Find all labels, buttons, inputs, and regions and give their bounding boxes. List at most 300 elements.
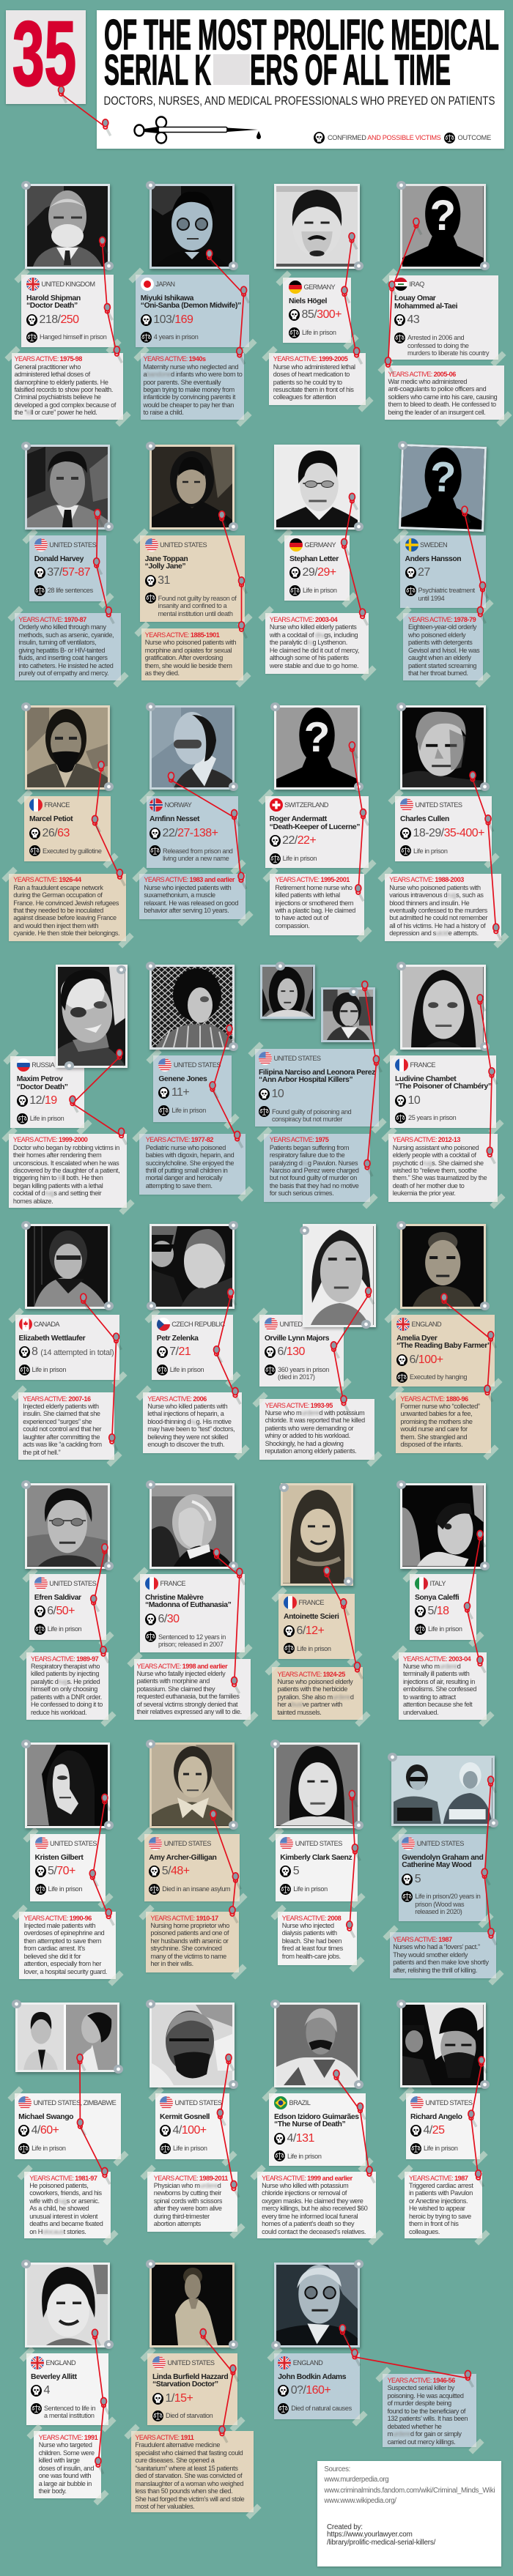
years: Saldivar: patients with a DNR order. (31, 1693, 102, 1701)
string: Malèvre (214, 1548, 245, 1693)
photo: Richard Angelo (400, 2002, 485, 2087)
photo: Amelia Dyer (400, 1224, 485, 1309)
years: Chambet: psychotic drugs. She claimed she (393, 1159, 484, 1167)
victims count (410, 2125, 479, 2137)
panel: sources and credits (317, 2461, 501, 2566)
photo: unknown silhouette (Hansson) (399, 444, 487, 532)
outcome: Life in prison (297, 1645, 331, 1652)
years: Jones: YEARS ACTIVE: 1977-82 (146, 1136, 213, 1143)
years: Caleffi: Nurse who murdered (403, 1663, 460, 1670)
string: Allitt (92, 2329, 108, 2474)
outcome (289, 327, 336, 338)
panel: Adams info (274, 2353, 360, 2419)
years: al-Taei: soldiers who came into his care, causing (388, 393, 497, 401)
string: Wettlaufer (81, 1293, 122, 1450)
photo: Stephan Letter (274, 445, 360, 530)
name (270, 815, 360, 831)
flag and country: NORWAY (164, 801, 191, 809)
victims count: 6/50+ (47, 1605, 75, 1617)
name: Efren Saldivar (34, 1594, 81, 1602)
outcome: Life in prison (293, 1885, 328, 1893)
panel: Andermatt info (265, 796, 369, 868)
years: Hazzard: died of starvation. She was convicted of (135, 2472, 242, 2479)
years: Scieri (271, 1667, 363, 1720)
years: Gosnell: YEARS ACTIVE: 1989-2011 (154, 2174, 228, 2181)
years: Graham and Wood: YEARS ACTIVE: 1987 (393, 1936, 452, 1943)
years: Zelenka (143, 1392, 242, 1453)
years: Gilbert: Injected male patients with (24, 1922, 95, 1929)
years: Guimarães: chloride injections or removal of (262, 2189, 347, 2197)
years: Angelo: Triggered cardiac arrest (409, 2182, 473, 2189)
years: Majors: YEARS ACTIVE: 1993-95 (265, 1402, 333, 1409)
flag and country (145, 538, 207, 552)
victims count (270, 835, 367, 847)
outcome: Died in an insane asylum (162, 1885, 230, 1893)
flag and country: UNITED STATES (49, 541, 96, 549)
years: Graham and Wood: Nurses who had a “lovers’ pact.” (393, 1943, 480, 1950)
years: Petiot: during the German occupation of (13, 891, 103, 899)
flag and country: UNITED STATES (167, 2359, 214, 2367)
years: Dyer: would nurse and care for (400, 1425, 468, 1433)
years: Petrov: triggering him to kill both. He then (13, 1174, 103, 1181)
years: Petrov: cocktail of drugs and setting their (13, 1189, 101, 1197)
years: Zelenka: lethal injections of heparin, a (147, 1410, 224, 1417)
string: Guimarães (333, 2070, 374, 2183)
years: Adams: murdered for gain or simply (388, 2430, 462, 2438)
flag and country: UNITED STATES (274, 1055, 320, 1062)
victims count: 10 (271, 1088, 284, 1100)
outcome (259, 1106, 377, 1124)
years: Majors: whiny or added to his workload. (265, 1432, 350, 1439)
photo: Sonya Caleffi (400, 1483, 485, 1569)
years: Andermatt: compassion. (275, 922, 309, 929)
photo: Marcel Petiot (25, 705, 110, 790)
years: Petrov: began killing patients with a lethal (13, 1182, 103, 1189)
years: Hansson: Gevisol and Ivisol. He was (408, 647, 479, 654)
victims count (405, 566, 430, 579)
credit: https://www.yourlawyer.com (327, 2531, 413, 2539)
panel: Graham and Wood info (399, 1834, 486, 1921)
flag and country (400, 798, 490, 812)
flag and country: FRANCE (44, 801, 70, 809)
panel: Letter info (284, 535, 350, 601)
outcome (402, 1891, 484, 1916)
years: Ishikawa: to raise a child. (144, 409, 184, 416)
string: Shipman (100, 237, 122, 363)
name (145, 1595, 243, 1610)
years: Allitt (34, 2431, 101, 2498)
flag and country: UNITED STATES (280, 1321, 326, 1328)
victims count (35, 1866, 104, 1877)
string: Angelo (468, 2057, 487, 2186)
string: Saenz (347, 1790, 360, 1937)
flag and country: RUSSIA (32, 1061, 54, 1069)
outcome: Life in prison (48, 1625, 81, 1633)
years: Narciso and Perez (264, 1134, 370, 1202)
flag and country (259, 1052, 377, 1065)
victims count: 18-29/35-400+ (413, 827, 484, 839)
panel: Shipman info (21, 275, 114, 347)
panel: Cullen info (395, 796, 491, 861)
years: Adams: found to be the beneficiary of (388, 2408, 465, 2415)
victims count (29, 827, 70, 839)
years: Saldivar (26, 1652, 108, 1720)
years: Archer-Gilligan: poisoned patients and one of (150, 1929, 229, 1937)
years: Harvey: methods, such as arsenic, cyanide, (18, 631, 114, 639)
flag and country: CZECH REPUBLIC (171, 1321, 225, 1328)
years: al-Taei (385, 365, 504, 420)
years: Allitt: a large air bubble in (39, 2480, 92, 2487)
years: Harvey (15, 613, 121, 680)
flag and country (284, 1596, 353, 1609)
outcome: a mental institution (44, 2412, 95, 2419)
outcome: Life in prison (303, 587, 337, 594)
years: Nesset: Nurse who injected patients with (144, 884, 231, 891)
years: Petrov: their homes after rendering them (13, 1151, 101, 1159)
string: Zelenka (214, 1289, 240, 1404)
years: Hazzard: most of her valuables. (135, 2503, 194, 2510)
years: al-Taei: anti-coagulants to police officers and (388, 385, 486, 393)
name: Gwendolyn Graham and (402, 1854, 483, 1862)
years: Gilbert: YEARS ACTIVE: 1990-96 (24, 1915, 92, 1922)
victims count (18, 2125, 119, 2137)
panel: Högel info (283, 278, 351, 343)
outcome (158, 1105, 230, 1116)
victims count: 37/57-87 (47, 566, 90, 579)
name: “Madonna of Euthanasia” (145, 1601, 231, 1609)
years: Angelo (405, 2172, 482, 2238)
years: Caleffi: terminally ill patients with (403, 1670, 469, 1677)
years: Narciso and Perez: respiratory failure due to the (270, 1151, 344, 1159)
years: Adams: carried out mercy killings. (388, 2438, 455, 2446)
years: Gosnell: during third-trimester (154, 2213, 210, 2220)
years: Gilbert: then attempted to save them (24, 1937, 101, 1945)
outcome: Life in prison (170, 1366, 204, 1373)
years: Letter: with a cocktail of drugs, including (270, 631, 358, 639)
years: Saenz: YEARS ACTIVE: 2008 (282, 1915, 341, 1922)
photo: Petr Zelenka (150, 1224, 235, 1309)
outcome: Executed by guillotine (43, 847, 102, 855)
years: Gilbert: attention, especially from her (24, 1960, 101, 1967)
victims count (280, 1866, 356, 1877)
photo: Harold Shipman (25, 184, 110, 269)
years: Letter: although some of his patients (270, 654, 349, 661)
years: Swango: As a child, he showed (29, 2205, 89, 2212)
years: Dyer: Former nurse who “collected” (400, 1403, 480, 1410)
years: Graham and Wood: after, relishing the thrill of killing. (393, 1967, 477, 1974)
name: Antoinette Scieri (284, 1613, 339, 1621)
years: Cullen: blood thinners and insulin. He (389, 899, 469, 907)
years: Caleffi: attention because she felt (403, 1701, 472, 1708)
victims count: 6/30 (158, 1613, 179, 1625)
flag and country: UNITED STATES (160, 541, 207, 549)
years: Swango: coworkers, friends, and his (29, 2189, 102, 2197)
years: Caleffi: undervalued. (403, 1709, 438, 1716)
photo: Ludivine Chambet (400, 965, 485, 1050)
flag and country (17, 1058, 83, 1072)
years: Allitt: doses of insulin, and (39, 2465, 94, 2472)
years: Toppan: gratification. After overdosing (145, 654, 223, 661)
years: Shipman: the “kill or cure” power he held. (15, 409, 97, 416)
name: “The Nurse of Death” (274, 2120, 345, 2128)
outcome: Died of natural causes (291, 2405, 352, 2412)
years: Andermatt: with a plastic bag. He claimed (275, 907, 355, 914)
years: Jones: Pediatric nurse who poisoned (146, 1144, 226, 1151)
outcome: 28 life sentences (48, 587, 93, 594)
years: Toppan: them, she would lie beside them (145, 662, 232, 669)
years: Petrov: YEARS ACTIVE: 1999-2000 (13, 1136, 87, 1143)
panel: Swango info (15, 2093, 121, 2159)
years: Narciso and Perez: for such serious crimes. (270, 1189, 333, 1197)
outcome (396, 1372, 493, 1383)
outcome (149, 1884, 238, 1895)
flag and country (410, 2096, 479, 2109)
name (152, 2374, 236, 2389)
name (394, 294, 457, 311)
photo: Edson Izidoro Guimarães (274, 2002, 360, 2087)
years: Swango: He poisoned patients, (29, 2182, 89, 2189)
years: Letter (265, 613, 369, 674)
years: Dyer: promising the mothers she (400, 1418, 473, 1425)
outcome: 25 years in prison (408, 1114, 456, 1121)
flag and country: IRAQ (409, 281, 424, 288)
flag and country: UNITED STATES (417, 1840, 464, 1847)
panel: Saenz info (276, 1834, 358, 1901)
name: “Jolly Jane” (145, 563, 185, 571)
years: Majors: chloride. It was reported that he killed (265, 1417, 365, 1424)
outcome (17, 1113, 83, 1124)
flag and country (405, 538, 447, 552)
legend: victims: CONFIRMED AND POSSIBLE VICTIMS (328, 134, 440, 141)
string: Gosnell (217, 2054, 239, 2197)
years: Archer-Gilligan (146, 1912, 239, 1972)
flag and country: UNITED STATES, ZIMBABWE (34, 2099, 116, 2107)
photo: John Bodkin Adams (274, 2262, 360, 2347)
photo: Kristen Gilbert (25, 1742, 110, 1828)
sources list: www.murderpedia.org (324, 2476, 388, 2484)
outcome (152, 2410, 236, 2421)
years: Shipman: General practitioner who (15, 363, 81, 371)
years: Swango: on Holocaust stories. (29, 2228, 86, 2235)
victims count (394, 313, 419, 326)
years: Malèvre: potassium. She claimed they (137, 1685, 215, 1693)
flag and country: UNITED STATES (425, 2099, 472, 2107)
outcome: Psychiatric treatment (418, 587, 475, 594)
years: Wettlaufer: Injected elderly patients with (23, 1403, 99, 1410)
flag and country (29, 798, 70, 812)
name: Sonya Caleffi (415, 1594, 459, 1602)
name: Christine Malèvre (145, 1594, 203, 1602)
years: Allitt: their body. (39, 2487, 67, 2495)
years: Petrov: discovered by the daughter of a patient, (13, 1167, 119, 1174)
photo: Maxim Petrov (56, 965, 128, 1068)
years: Caleffi: YEARS ACTIVE: 2003-04 (403, 1655, 470, 1663)
years: Swango: YEARS ACTIVE: 1981-97 (29, 2174, 97, 2181)
years: Gosnell: spinal cords with scissors (154, 2197, 222, 2205)
years: Narciso and Perez: the basis that they had no motive (270, 1182, 358, 1189)
years: Shipman: falsified records to show poor health. (15, 386, 113, 393)
outcome (394, 333, 490, 357)
victims count (265, 1346, 342, 1358)
panel: Nesset info (147, 796, 237, 868)
years: Högel: YEARS ACTIVE: 1999-2005 (273, 355, 347, 363)
title heading (104, 12, 499, 108)
years: Saenz: fired at least four times (282, 1945, 343, 1952)
name: “Ann Arbor Hospital Killers” (259, 1076, 353, 1084)
panel: Petrov info (10, 1056, 84, 1128)
outcome: Executed by hanging (410, 1373, 467, 1381)
panel: Gosnell info (155, 2093, 229, 2159)
years: Hazzard: manslaughter of a woman who weighed (135, 2480, 243, 2487)
victims count: 103/169 (153, 313, 193, 326)
years: al-Taei: YEARS ACTIVE: 2005-06 (388, 371, 456, 378)
flag and country: UNITED KINGDOM (41, 281, 95, 288)
years: Chambet: YEARS ACTIVE: 2012-13 (393, 1136, 460, 1143)
years: Harvey: purely out of empathy and mercy. (18, 669, 108, 677)
photo: Beverley Allitt (25, 2262, 110, 2347)
years: Scieri: her abusive partner with (277, 1701, 342, 1708)
outcome: Hanged himself in prison (40, 333, 106, 341)
string: Swango (77, 2054, 110, 2184)
string: Majors (331, 1288, 374, 1412)
photo: Amy Archer-Gilligan (150, 1742, 235, 1828)
flag and country (280, 1837, 356, 1850)
victims count: 0?/160+ (291, 2384, 331, 2397)
victims count: 6/130 (277, 1345, 305, 1358)
flag and country (158, 1058, 230, 1072)
victims count: 10 (407, 1094, 420, 1107)
years: Majors (259, 1399, 374, 1460)
years: Wettlaufer: YEARS ACTIVE: 2007-16 (23, 1395, 91, 1402)
victims count (152, 2393, 236, 2405)
outcome (270, 853, 367, 864)
victims count: 5/70+ (48, 1865, 75, 1877)
title heading: SERIAL K (104, 47, 211, 94)
years: Petrov (9, 1134, 127, 1208)
name: Amelia Dyer (396, 1335, 437, 1343)
years: Guimarães: mercy killings, but he also received $60 (262, 2205, 367, 2212)
photo: Elizabeth Wettlaufer (25, 1224, 110, 1309)
years: Petiot: cyanide. He then stole their belongings. (13, 929, 119, 937)
victims count: 7/21 (169, 1345, 191, 1358)
string: header (59, 86, 111, 136)
years: Malèvre: their relatives expressed any will to die. (137, 1708, 242, 1715)
victims count: 11+ (171, 1086, 189, 1099)
years: Adams: poisoning. He was acquitted (388, 2392, 464, 2399)
years: Petrov: Doctor who began by robbing victims in (13, 1144, 119, 1151)
years: Gosnell: newborns by cutting their (154, 2189, 221, 2197)
years: Hansson: caught when an elderly (408, 654, 471, 661)
photo: Niels Högel (274, 184, 360, 269)
name: “Doctor Death” (17, 1083, 68, 1091)
years: Hazzard: specialist who claimed that fasting could (135, 2449, 243, 2457)
legend: victims (314, 132, 441, 144)
victims count: 4/100+ (173, 2124, 207, 2137)
name (17, 1076, 83, 1091)
years: Narciso and Perez: but not found guilty of murder on (270, 1174, 357, 1181)
years: Saenz (278, 1912, 357, 1965)
panel: Petiot info (24, 796, 111, 861)
name: “The Reading Baby Farmer” (396, 1342, 491, 1350)
name: Niels Högel (289, 297, 327, 305)
string: Petiot (92, 762, 125, 886)
years: Guimarães: YEARS ACTIVE: 1999 and earlier (262, 2174, 353, 2181)
years: al-Taei: War medic who administered (388, 378, 467, 385)
years: Högel: doses of heart medication to (273, 371, 350, 378)
years: Högel: patients so he could try to (273, 379, 342, 386)
string: Högel (342, 233, 362, 364)
panel: al-Taei info (389, 275, 498, 360)
outcome: Life in prison (48, 1885, 82, 1893)
name: Richard Angelo (410, 2113, 462, 2121)
years: Graham and Wood: patients and then make love shortly (393, 1959, 489, 1966)
outcome: Life in prison (32, 2145, 66, 2152)
victims count: 31 (158, 574, 170, 587)
flag and country (289, 538, 336, 552)
years: Malèvre (134, 1659, 251, 1720)
photo: Filipina Narciso (260, 965, 315, 1019)
years: Nesset: YEARS ACTIVE: 1983 and earlier (144, 876, 235, 883)
sources list: www.www.wikipedia.org/ (324, 2497, 396, 2505)
years: Hansson: who poisoned elderly (408, 631, 465, 639)
years: Zelenka: may have been to “test” doctors, (147, 1425, 235, 1433)
years: Jones (139, 1134, 246, 1195)
years: Angelo: heroic by trying to save (409, 2213, 471, 2220)
years: Hazzard: less than 50 pounds when she died. (135, 2487, 232, 2495)
sources list (324, 2465, 495, 2507)
outcome (18, 2143, 119, 2154)
years: Ishikawa: YEARS ACTIVE: 1940s (144, 355, 206, 363)
years: Saenz: dialysis patients with (282, 1929, 337, 1937)
years: Harvey: YEARS ACTIVE: 1970-87 (18, 616, 86, 623)
years: Adams: debated whether he (388, 2423, 442, 2430)
victims count: 12/19 (29, 1094, 57, 1107)
flag and country: JAPAN (155, 281, 174, 288)
years: Andermatt: to have acted out of (275, 914, 328, 921)
years: Saldivar: YEARS ACTIVE: 1989-97 (31, 1655, 98, 1663)
years: Ishikawa: poor parents. She eventually (144, 379, 221, 386)
string: Letter (342, 494, 368, 626)
flag and country: FRANCE (410, 1061, 435, 1069)
years: Archer-Gilligan: her husbands with arsenic or (150, 1937, 229, 1945)
years: Narciso and Perez: paralyzing drug Pavulon. Nurses (270, 1159, 358, 1167)
name (274, 2114, 364, 2129)
years: Petiot: that they needed to be inoculated (13, 907, 103, 914)
flag and country (274, 2096, 364, 2109)
victims count (34, 1606, 105, 1617)
victims count: 29/29+ (302, 566, 336, 579)
flag and country: SWITZERLAND (284, 801, 328, 809)
name (259, 1069, 377, 1085)
flag and country (289, 281, 336, 294)
flag and country (145, 1577, 243, 1590)
victims count: 8 (14 attempted in total) (32, 1345, 114, 1358)
flag and country: ENGLAND (412, 1321, 441, 1328)
panel: Toppan info (140, 535, 245, 622)
victims count (17, 1095, 83, 1107)
years: Swango: unusual interest in violent (29, 2213, 97, 2220)
years: Adams (383, 2374, 476, 2447)
years: Nesset (139, 874, 246, 919)
photo: Efren Saldivar (25, 1483, 110, 1569)
victims count (402, 1874, 484, 1885)
years: Hazzard: She had forged the victim’s will and stole (135, 2495, 244, 2503)
years: Letter: the paralytic drug Lysthenon. (270, 639, 347, 646)
years: Hansson: that her throat burned. (408, 669, 468, 677)
years: Zelenka: enough to discover the truth. (147, 1441, 224, 1448)
photo: Antoinette Scieri (281, 1483, 353, 1586)
years: Malèvre: Nurse who fatally injected elderly (137, 1670, 225, 1677)
